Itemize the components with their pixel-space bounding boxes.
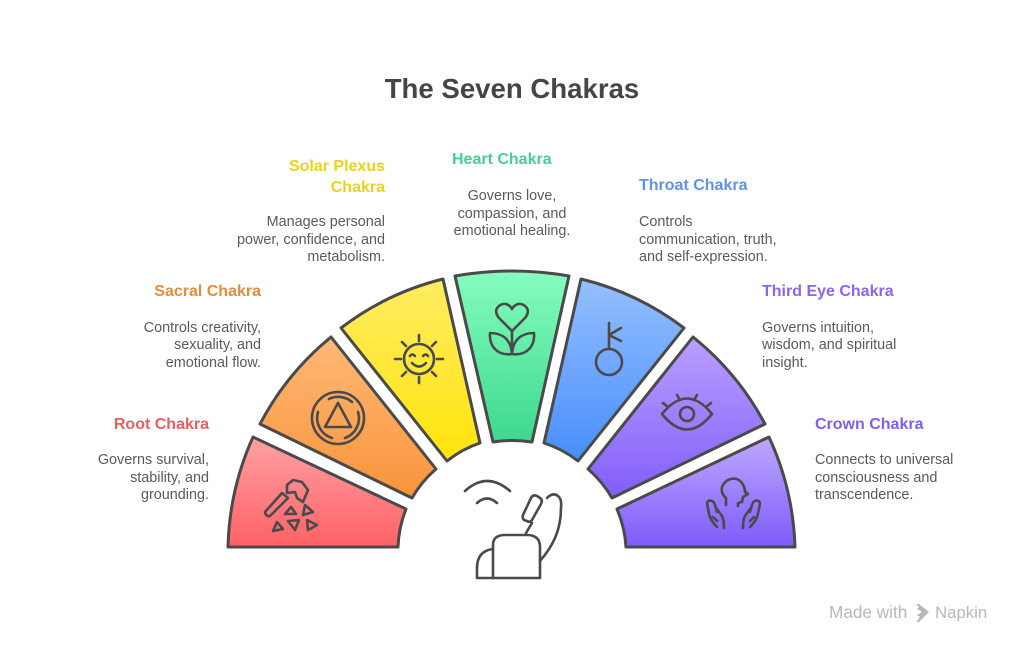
label: root chakra: Governs survival,: [98, 452, 209, 468]
segment: throat chakra: [544, 279, 684, 461]
icon: smiling sun: [395, 335, 443, 383]
label: root chakra: stability, and: [130, 470, 209, 486]
label: solar plexus chakra: power, confidence, and: [237, 232, 385, 248]
label: crown chakra: transcendence.: [815, 487, 913, 503]
label: solar plexus chakra: [237, 158, 385, 265]
icon: massage chair with waves: [465, 481, 561, 578]
segment: root chakra: [228, 437, 406, 547]
label: throat chakra: and self-expression.: [639, 249, 768, 265]
segment: crown chakra: [617, 437, 795, 547]
icon: heart flower: [490, 304, 534, 354]
watermark: made with napkin: [829, 602, 987, 622]
icon: head and hands: [707, 479, 760, 528]
label: throat chakra: Throat Chakra: [639, 177, 748, 194]
segment: solar plexus chakra: [341, 279, 480, 461]
label: solar plexus chakra: metabolism.: [307, 249, 385, 265]
label: throat chakra: communication, truth,: [639, 232, 777, 248]
label: root chakra: grounding.: [141, 487, 209, 503]
label: third eye chakra: [761, 283, 896, 371]
label: heart chakra: [452, 151, 570, 239]
label: crown chakra: consciousness and: [815, 470, 937, 486]
icon: key symbol: [596, 323, 622, 375]
segment: sacral chakra: [260, 337, 436, 498]
label: third eye chakra: wisdom, and spiritual: [761, 337, 896, 353]
label: crown chakra: Crown Chakra: [815, 416, 924, 433]
label: heart chakra: Governs love,: [468, 188, 556, 204]
label: heart chakra: compassion, and: [458, 206, 566, 222]
label: crown chakra: [815, 416, 953, 503]
label: third eye chakra: Governs intuition,: [762, 320, 874, 336]
label: solar plexus chakra: Manages personal: [267, 214, 385, 230]
label: sacral chakra: Sacral Chakra: [154, 283, 261, 300]
label: heart chakra: emotional healing.: [454, 223, 570, 239]
label: third eye chakra: insight.: [762, 355, 808, 371]
label: solar plexus chakra: Solar Plexus: [289, 158, 385, 175]
label: root chakra: [98, 416, 209, 503]
watermark: made with napkin: Made with: [829, 602, 907, 622]
label: third eye chakra: Third Eye Chakra: [762, 283, 894, 300]
label: crown chakra: Connects to universal: [815, 452, 953, 468]
label: sacral chakra: Controls creativity,: [144, 320, 261, 336]
icon: axe and stones: [265, 480, 317, 531]
label: throat chakra: Controls: [639, 214, 693, 230]
segment: third eye chakra: [588, 337, 765, 498]
label: heart chakra: Heart Chakra: [452, 151, 552, 168]
label: solar plexus chakra: Chakra: [331, 179, 385, 196]
label: throat chakra: [639, 177, 777, 265]
label: sacral chakra: sexuality, and: [174, 337, 261, 353]
label: sacral chakra: emotional flow.: [166, 355, 261, 371]
label: root chakra: Root Chakra: [114, 416, 209, 433]
watermark: made with napkin: Napkin: [935, 603, 987, 622]
title: The Seven Chakras: [385, 73, 639, 104]
label: sacral chakra: [144, 283, 261, 371]
icon: eye: [662, 395, 712, 430]
icon: circled triangle: [312, 392, 364, 444]
segment: heart chakra: [455, 271, 569, 442]
